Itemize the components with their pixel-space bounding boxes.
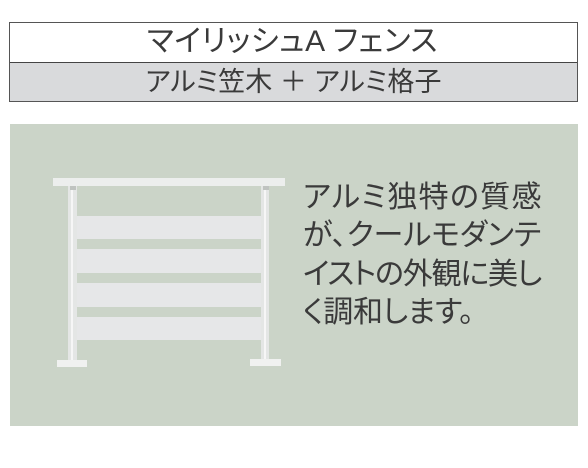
subheading: materials (10, 62, 577, 101)
heading: product name: マイリッシュA フェンス (147, 25, 438, 58)
header table (9, 22, 578, 102)
text block: description: が、クールモダンテ (303, 219, 541, 252)
posts (68, 186, 269, 360)
text block: description: アルミ独特の質感 (303, 181, 543, 214)
slats (77, 216, 261, 340)
illustration: aluminium fence (53, 178, 285, 367)
text block: description (303, 181, 543, 329)
text block: description: く調和します。 (303, 296, 474, 329)
panel: fence description (10, 124, 578, 426)
top rail (53, 178, 285, 186)
subheading: materials: アルミ笠木 ＋ アルミ格子 (145, 67, 442, 97)
text block: description: イストの外観に美し (303, 258, 541, 291)
feet (57, 359, 281, 367)
